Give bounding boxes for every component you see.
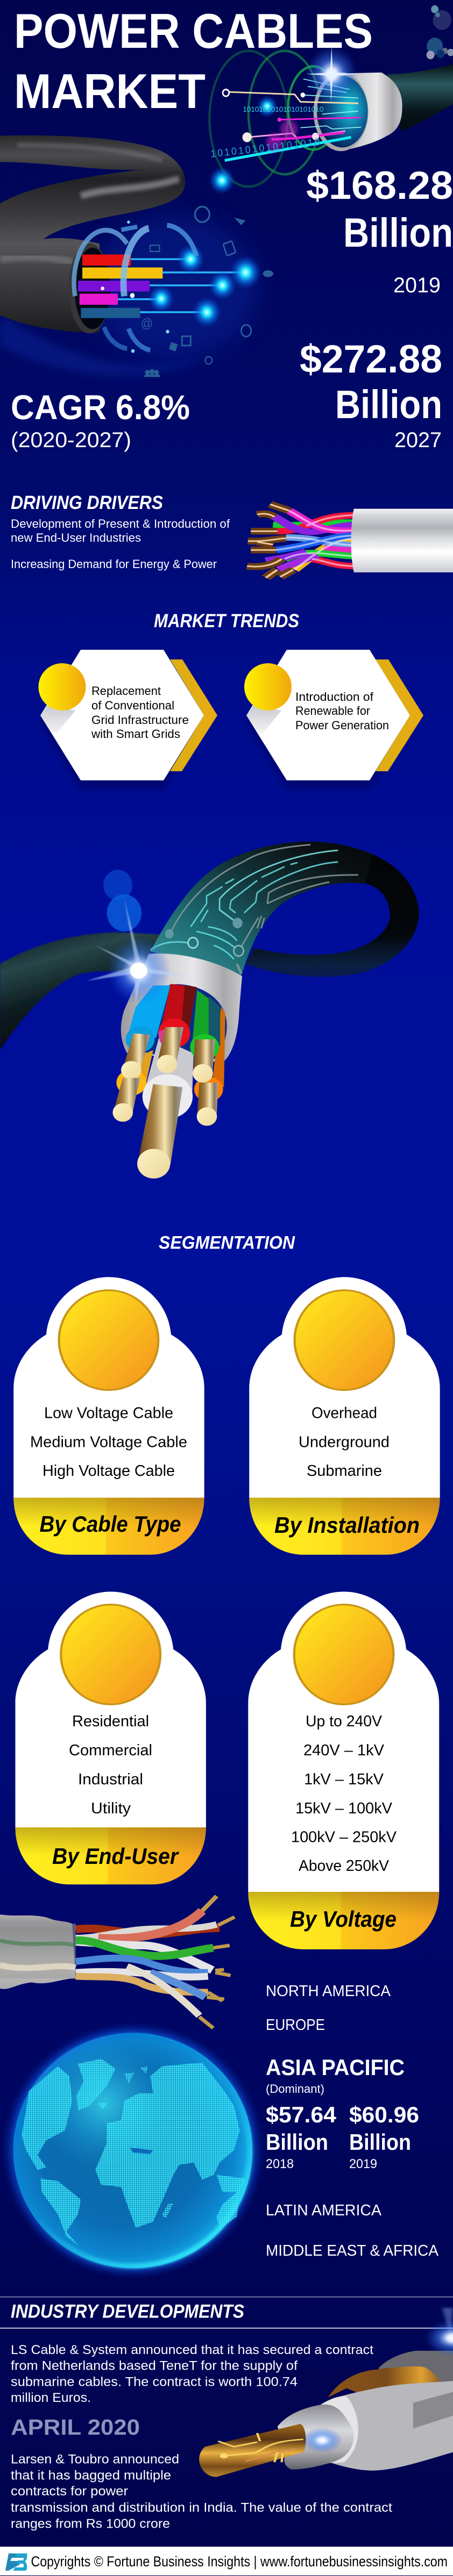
glowing green rings [209, 51, 339, 186]
list: voltage ranges: Above 250kV [299, 1857, 390, 1875]
binary text: 10101010101010101010 [243, 105, 324, 113]
panel: trend card 2 [244, 650, 423, 790]
label: by installation: By Installation [274, 1512, 420, 1538]
region: asia pacific: 2018 [266, 2157, 294, 2171]
text: renewable: Introduction of [295, 690, 374, 704]
title: POWER CABLES [14, 4, 373, 59]
text block: LS Cable: submarine cables. The contract is worth 100.74 [11, 2374, 298, 2390]
footer [0, 2546, 453, 2575]
icon: multicolour wire bundle [247, 504, 453, 578]
arcs [74, 225, 196, 350]
CAGR [11, 388, 190, 452]
list: voltage ranges: Up to 240V [306, 1713, 383, 1730]
region: asia pacific: (Dominant) [266, 2082, 324, 2096]
panel: by cable type [13, 1277, 204, 1555]
title: MARKET [14, 64, 206, 119]
panel: regions [266, 1983, 439, 2259]
red wire [160, 984, 196, 1033]
text block: Larsen and Toubro: ranges from Rs 1000 crore [11, 2516, 170, 2531]
icon: coaxial cable [199, 2308, 453, 2477]
label: by cable type: By Cable Type [40, 1511, 181, 1537]
chart: dotted world globe [8, 2028, 258, 2273]
region: asia pacific: 2019 [349, 2157, 377, 2171]
text: grid replacement: of Conventional [91, 699, 174, 712]
green wire [192, 990, 220, 1045]
list: end users: Residential [72, 1713, 149, 1730]
label: by end-user: By End-User [52, 1843, 179, 1869]
copper strands [247, 504, 293, 578]
text block: drivers: Development of Present & Introduction of [11, 517, 230, 530]
icon: fibre optic cable top right [209, 5, 453, 195]
list: voltage ranges: 240V – 1kV [303, 1742, 385, 1759]
heading: industry developments: INDUSTRY DEVELOPMENTS [11, 2301, 244, 2322]
text block: LS Cable: LS Cable & System announced that it has secured a contract [11, 2343, 373, 2357]
title [14, 4, 373, 119]
text: grid replacement: Replacement [91, 684, 161, 698]
coloured wires [82, 255, 131, 266]
icons: faint digital symbols [141, 207, 273, 377]
text: grid replacement: Grid Infrastructure [91, 713, 189, 727]
panel: by end-user [15, 1592, 206, 1884]
market size 2019: 2019 [393, 274, 441, 297]
glare [306, 46, 358, 102]
circuit traces [150, 845, 358, 974]
market size 2027: $272.88 [300, 338, 442, 381]
text block: Larsen and Toubro: transmission and distribution in India. The value of the contract [11, 2500, 392, 2515]
icons: faint digital symbols: @ [141, 316, 153, 331]
text: grid replacement: with Smart Grids [91, 727, 180, 741]
label: by voltage: By Voltage [290, 1906, 397, 1932]
land underlay [22, 2059, 245, 2245]
bokeh and glare [103, 870, 132, 901]
date: april 2020: APRIL 2020 [11, 2415, 140, 2439]
text block: drivers: new End-User Industries [11, 531, 141, 544]
panel: by voltage [248, 1592, 439, 1949]
heading: driving drivers: DRIVING DRIVERS [11, 492, 163, 513]
list: end users [69, 1713, 152, 1817]
market size 2019: $168.28 [306, 164, 453, 207]
list: installation types: Overhead [312, 1405, 377, 1422]
icon: yellow circle [244, 663, 292, 711]
market size 2027 [300, 338, 442, 452]
silver collar [121, 953, 242, 1063]
region: middle east and africa: MIDDLE EAST & AFRICA [266, 2242, 439, 2259]
region: asia pacific [266, 2055, 419, 2171]
list: voltage ranges: 100kV – 250kV [291, 1828, 397, 1846]
icon: black power cable with coloured wires [0, 135, 273, 377]
icon: fortune business insights logo [5, 2553, 27, 2571]
dotted continents [22, 2059, 245, 2245]
list: end users: Utility [91, 1800, 131, 1817]
heading: market trends: MARKET TRENDS [154, 611, 299, 632]
text block: drivers [11, 517, 230, 571]
text block: Larsen and Toubro: that it has bagged multiple [11, 2468, 171, 2483]
text block: Larsen and Toubro: contracts for power [11, 2484, 128, 2499]
heading: segmentation: SEGMENTATION [159, 1233, 295, 1253]
yellow wire [127, 1050, 153, 1084]
panel: driving drivers [11, 492, 453, 578]
region: asia pacific: Billion [349, 2129, 411, 2155]
text block: drivers: Increasing Demand for Energy & Power [11, 557, 217, 571]
binary text [210, 105, 324, 160]
text: grid replacement [91, 684, 189, 741]
region: asia pacific: $60.96 [349, 2102, 419, 2127]
white core [143, 1038, 194, 1096]
region: north america: NORTH AMERICA [266, 1983, 391, 2000]
list: end users: Industrial [78, 1771, 143, 1788]
list: installation types [299, 1405, 390, 1480]
CAGR: CAGR 6.8% [11, 388, 190, 427]
icon: large multicore cable illustration [0, 842, 419, 1179]
list: cable types [30, 1405, 187, 1480]
region: asia pacific: $57.64 [266, 2102, 337, 2127]
region: europe: EUROPE [266, 2017, 325, 2034]
list: voltage ranges: 1kV – 15kV [304, 1771, 384, 1788]
list: cable types: High Voltage Cable [43, 1462, 175, 1480]
list: voltage ranges [291, 1713, 397, 1875]
glowing fibres [118, 259, 245, 312]
list: cable types: Low Voltage Cable [44, 1405, 173, 1422]
panel: industry developments [11, 2301, 392, 2531]
panel: trend card 1 [39, 650, 217, 790]
text block: Larsen and Toubro [11, 2452, 392, 2531]
market size 2019 [306, 164, 453, 297]
list: voltage ranges: 15kV – 100kV [295, 1800, 393, 1817]
text: renewable [295, 690, 389, 732]
list: installation types: Submarine [307, 1462, 382, 1480]
market size 2027: 2027 [394, 428, 442, 452]
list: end users: Commercial [69, 1742, 152, 1759]
text block: LS Cable: from Netherlands based TeneT for the supply of [11, 2358, 298, 2373]
region: latin america: LATIN AMERICA [266, 2202, 382, 2219]
blue wire [127, 985, 171, 1038]
text block: LS Cable: million Euros. [11, 2391, 91, 2405]
fibre lines [225, 79, 361, 160]
list: installation types: Underground [299, 1434, 390, 1451]
CAGR: (2020-2027) [11, 428, 131, 452]
orange wire [213, 1007, 225, 1087]
copper rods [123, 1033, 150, 1070]
panel: header with market size [0, 4, 453, 452]
binary text: 1010101010101010 [210, 135, 320, 160]
text block: LS Cable [11, 2343, 373, 2405]
icon: twisted-pair cable [0, 1896, 235, 2028]
region: asia pacific: Billion [266, 2129, 328, 2155]
text: renewable: Renewable for [295, 704, 370, 717]
panel: by installation [249, 1277, 440, 1555]
text: renewable: Power Generation [295, 719, 389, 732]
icon: yellow circle [39, 663, 86, 711]
list: cable types: Medium Voltage Cable [30, 1434, 187, 1451]
text block: Larsen and Toubro: Larsen & Toubro announced [11, 2452, 179, 2467]
region: asia pacific: ASIA PACIFIC [266, 2055, 405, 2080]
